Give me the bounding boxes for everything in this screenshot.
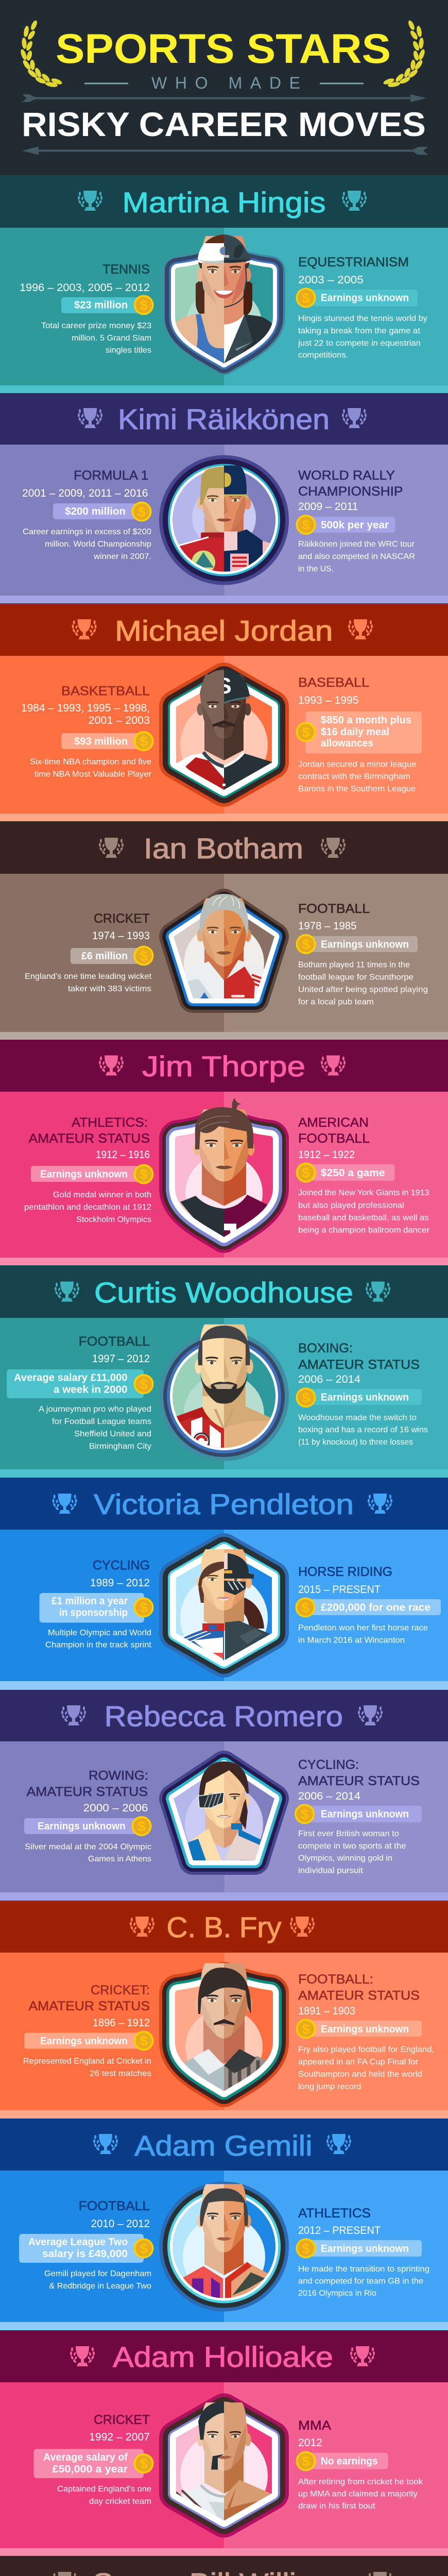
right career: baseball: BASEBALL bbox=[298, 675, 369, 690]
right career: boxing: BOXING: bbox=[298, 1341, 353, 1355]
icon: trophy right bbox=[358, 1705, 383, 1725]
cap letter: S bbox=[216, 673, 232, 699]
left career: cycling: 1989 – 2012 bbox=[90, 1577, 150, 1589]
icon: trophy right bbox=[342, 408, 367, 428]
icon: trophy left bbox=[53, 2572, 77, 2576]
icon: trophy left bbox=[99, 1055, 124, 1076]
left career: tennis: $ bbox=[140, 298, 148, 313]
right career: football: United after being spotted playing bbox=[298, 986, 428, 994]
heading: Adam Hollioake: Adam Hollioake bbox=[113, 2341, 333, 2373]
right career: boxing: Earnings unknown bbox=[321, 1392, 409, 1403]
right career: cycling: First ever British woman to bbox=[298, 1829, 399, 1838]
right career: World Rally Championship: 500k per year bbox=[321, 519, 389, 531]
panel: Jim Thorpe bbox=[0, 1040, 448, 1265]
right career: football: 1891 – 1903 bbox=[298, 2005, 355, 2017]
panel: Ian Botham bbox=[0, 821, 448, 1040]
right career: World Rally Championship: in the US. bbox=[298, 565, 334, 573]
arrow: top bbox=[22, 94, 426, 102]
left career: cricket: 1896 – 1912 bbox=[93, 2017, 150, 2029]
left career: cricket bbox=[25, 911, 153, 993]
right career: horse riding: $ bbox=[301, 1600, 309, 1616]
icon: trophy left bbox=[99, 838, 124, 858]
left career: cricket: 1992 – 2007 bbox=[89, 2431, 150, 2443]
portrait badge: Adam Hollioake bbox=[173, 2402, 275, 2528]
right career: American football: FOOTBALL bbox=[298, 1131, 370, 1146]
right career: horse riding bbox=[296, 1565, 441, 1645]
left career: tennis: million. 5 Grand Slam bbox=[72, 334, 151, 343]
left career: cycling: Champion in the track sprint bbox=[45, 1641, 152, 1650]
left career: tennis: singles titles bbox=[106, 346, 151, 354]
right career: cycling: Olympics, winning gold in bbox=[298, 1854, 392, 1863]
right career: World Rally Championship: WORLD RALLY bbox=[298, 468, 395, 483]
left career: Formula 1: $200 million bbox=[65, 506, 126, 517]
left career: football: $ bbox=[140, 1377, 148, 1392]
left career: Formula 1: Career earnings in excess of $200 bbox=[23, 528, 151, 536]
right career: American football: but also played professional bbox=[298, 1201, 404, 1210]
right career: athletics bbox=[296, 2206, 429, 2298]
left career: basketball: BASKETBALL bbox=[61, 684, 150, 699]
icon: trophy left bbox=[55, 1282, 79, 1301]
left career: cricket: day cricket team bbox=[89, 2497, 151, 2506]
right career: baseball: $ bbox=[302, 724, 310, 740]
right career: football: $ bbox=[302, 937, 310, 952]
left career: rowing: ROWING: bbox=[89, 1768, 148, 1783]
title: Sports Stars: SPORTS STARS bbox=[56, 26, 391, 72]
right career: football: $ bbox=[302, 2022, 310, 2037]
icon: trophy left bbox=[72, 619, 97, 639]
right career: horse riding: HORSE RIDING bbox=[298, 1565, 392, 1579]
left career: basketball: 2001 – 2003 bbox=[89, 715, 150, 726]
heading: Ian Botham: Ian Botham bbox=[144, 832, 303, 865]
left career: athletics: ATHLETICS: bbox=[72, 1115, 148, 1130]
right career: World Rally Championship: CHAMPIONSHIP bbox=[298, 484, 403, 499]
subtitle: who made: WHO MADE bbox=[151, 74, 300, 92]
left career: cricket: Represented England at Cricket in bbox=[23, 2057, 151, 2066]
right career: equestrianism: just 22 to compete in equestrian bbox=[298, 339, 421, 348]
left career: football: & Redbridge in League Two bbox=[49, 2282, 151, 2291]
left career: cricket: Earnings unknown bbox=[40, 2036, 128, 2047]
icon: trophy right bbox=[368, 2572, 392, 2576]
icon: trophy right bbox=[368, 1494, 392, 1514]
right career: football: football league for Scunthorpe bbox=[298, 973, 413, 981]
right career: American football: AMERICAN bbox=[298, 1115, 369, 1130]
portrait badge: Michael Jordan bbox=[173, 670, 275, 802]
left career: tennis bbox=[20, 262, 153, 354]
left career: basketball: time NBA Most Valuable Player bbox=[35, 770, 152, 779]
left career: Formula 1: million. World Championship bbox=[45, 540, 151, 549]
left career: cricket: $ bbox=[140, 948, 148, 963]
panel: Adam Hollioake bbox=[0, 2330, 448, 2556]
right career: athletics: 2016 Olympics in Rio bbox=[298, 2289, 376, 2298]
portrait badge: Adam Gemili bbox=[159, 2181, 289, 2311]
left career: football bbox=[19, 2199, 153, 2291]
right career: boxing bbox=[296, 1341, 428, 1447]
left career: athletics: Stockholm Olympics bbox=[76, 1215, 151, 1224]
right career: cycling: CYCLING: bbox=[298, 1757, 359, 1772]
left career: Formula 1 bbox=[22, 468, 151, 561]
right career: baseball: contract with the Birmingham bbox=[298, 772, 410, 781]
right career: American football: being a champion ballroom dancer bbox=[298, 1226, 430, 1234]
panel: Kimi Räikkönen bbox=[0, 393, 448, 603]
left career: cycling: CYCLING bbox=[93, 1558, 150, 1572]
right career: boxing: 2006 – 2014 bbox=[298, 1374, 360, 1385]
right career: cycling: individual pursuit bbox=[298, 1866, 364, 1875]
panel: Curtis Woodhouse bbox=[0, 1265, 448, 1478]
right career: athletics: $ bbox=[302, 2241, 310, 2257]
left career: football: FOOTBALL bbox=[79, 2199, 150, 2213]
left career: football: a week in 2000 bbox=[54, 1384, 128, 1395]
right career: football: Southampton and held the world bbox=[298, 2070, 422, 2079]
icon: trophy right bbox=[348, 619, 373, 639]
left career: rowing: 2000 – 2006 bbox=[83, 1802, 148, 1814]
right career: cycling: Earnings unknown bbox=[321, 1809, 409, 1820]
right career: football: Earnings unknown bbox=[321, 2024, 409, 2035]
left career: athletics: $ bbox=[140, 1166, 148, 1182]
icon: trophy left bbox=[130, 1917, 154, 1937]
icon: trophy left bbox=[53, 1494, 77, 1514]
left career: rowing: $ bbox=[137, 1819, 146, 1834]
left career: basketball: Six-time NBA champion and five bbox=[30, 758, 151, 767]
right career: MMA bbox=[296, 2418, 423, 2511]
icon: trophy left bbox=[93, 2134, 118, 2154]
right career: American football: $250 a game bbox=[321, 1167, 385, 1179]
heading: Victoria Pendleton: Victoria Pendleton bbox=[94, 1488, 354, 1520]
left career: tennis: Total career prize money $23 bbox=[41, 321, 151, 330]
right career: World Rally Championship: and also competed in NASCAR bbox=[298, 552, 415, 561]
right career: boxing: AMATEUR STATUS bbox=[298, 1358, 420, 1372]
right career: equestrianism bbox=[296, 255, 427, 360]
right career: baseball: Jordan secured a minor league bbox=[298, 760, 417, 769]
right career: MMA: MMA bbox=[298, 2418, 331, 2433]
right career: baseball bbox=[296, 675, 422, 793]
left career: football: Sheffield United and bbox=[74, 1430, 151, 1438]
right career: MMA: No earnings bbox=[321, 2455, 378, 2467]
right career: cycling: AMATEUR STATUS bbox=[298, 1774, 420, 1788]
left career: Formula 1: winner in 2007. bbox=[93, 552, 151, 561]
left career: Formula 1: FORMULA 1 bbox=[74, 468, 148, 483]
panel: Sonny Bill Williams bbox=[0, 2556, 448, 2576]
left career: basketball bbox=[21, 684, 153, 779]
heading: Adam Gemili: Adam Gemili bbox=[134, 2129, 313, 2162]
right career: boxing: (11 by knockout) to three losses bbox=[298, 1438, 413, 1447]
left career: cycling: $ bbox=[140, 1600, 148, 1616]
right career: equestrianism: $ bbox=[302, 291, 310, 306]
left career: cycling: in sponsorship bbox=[59, 1607, 128, 1619]
left career: rowing: Earnings unknown bbox=[38, 1821, 126, 1832]
left career: football: Birmingham City bbox=[89, 1442, 151, 1451]
right career: football: Fry also played football for England, bbox=[298, 2045, 434, 2054]
right career: American football: 1912 – 1922 bbox=[298, 1149, 355, 1161]
right career: football: Earnings unknown bbox=[321, 939, 409, 951]
right career: equestrianism: Hingis stunned the tennis world by bbox=[298, 314, 427, 323]
panel: Adam Gemili bbox=[0, 2119, 448, 2330]
icon: right laurel bbox=[383, 20, 426, 88]
right career: MMA: draw in his first bout bbox=[298, 2502, 375, 2511]
right career: MMA: After retiring from cricket he took bbox=[298, 2478, 423, 2486]
right career: baseball: $850 a month plus bbox=[321, 715, 411, 726]
left career: football: FOOTBALL bbox=[79, 1334, 150, 1349]
portrait badge: C. B. Fry bbox=[173, 1963, 275, 2096]
left career: cricket: $ bbox=[140, 2456, 148, 2471]
right career: MMA: 2012 bbox=[298, 2437, 322, 2449]
portrait badge: Ian Botham bbox=[173, 894, 275, 1004]
right career: boxing: boxing and has a record of 16 wins bbox=[298, 1426, 428, 1434]
panel: Martina Hingis bbox=[0, 175, 448, 393]
portrait badge: Curtis Woodhouse bbox=[159, 1325, 289, 1461]
right career: athletics: ATHLETICS bbox=[298, 2206, 371, 2221]
right career: football: Botham played 11 times in the bbox=[298, 960, 410, 970]
left career: athletics: 1912 – 1916 bbox=[96, 1149, 150, 1161]
left career: tennis: 1996 – 2003, 2005 – 2012 bbox=[20, 282, 150, 294]
portrait badge: Victoria Pendleton bbox=[173, 1544, 275, 1670]
icon: trophy right bbox=[342, 191, 367, 211]
left career: cricket: £6 million bbox=[81, 951, 128, 962]
left career: football: Gemili played for Dagenham bbox=[44, 2269, 151, 2278]
left career: athletics: Gold medal winner in both bbox=[53, 1191, 151, 1199]
left career: basketball: 1984 – 1993, 1995 – 1998, bbox=[21, 702, 150, 714]
left career: Formula 1: $ bbox=[137, 504, 146, 519]
right career: boxing: $ bbox=[302, 1390, 310, 1405]
right career: American football: $ bbox=[302, 1165, 310, 1181]
right career: baseball: 1993 – 1995 bbox=[298, 694, 358, 706]
portrait badge: Rebecca Romero bbox=[173, 1761, 275, 1866]
right career: baseball: Barons in the Southern League bbox=[298, 785, 416, 793]
right career: MMA: up MMA and claimed a majority bbox=[298, 2489, 418, 2498]
left career: cricket: England’s one time leading wicket bbox=[25, 972, 152, 981]
right career: horse riding: 2015 – PRESENT bbox=[298, 1584, 381, 1596]
right career: football: 1978 – 1985 bbox=[298, 920, 356, 932]
right career: World Rally Championship: Räikkönen joined the WRC tour bbox=[298, 540, 415, 549]
left career: cricket: 26 test matches bbox=[90, 2070, 151, 2078]
title: Risky Career Moves: RISKY CAREER MOVES bbox=[22, 105, 426, 143]
right career: football bbox=[296, 1972, 434, 2091]
left career: football: for Football League teams bbox=[52, 1417, 151, 1426]
heading: Curtis Woodhouse: Curtis Woodhouse bbox=[94, 1276, 353, 1309]
right career: American football bbox=[296, 1115, 430, 1234]
right career: World Rally Championship: 2009 – 2011 bbox=[298, 501, 358, 513]
right career: athletics: and competed for team GB in the bbox=[298, 2277, 423, 2286]
right career: equestrianism: competitions. bbox=[298, 351, 348, 360]
left career: basketball: $93 million bbox=[74, 736, 128, 748]
left career: tennis: TENNIS bbox=[102, 262, 150, 277]
right career: horse riding: in March 2016 at Wincanton bbox=[298, 1636, 405, 1645]
left career: rowing: Silver medal at the 2004 Olympic bbox=[25, 1842, 151, 1852]
heading: Michael Jordan: Michael Jordan bbox=[115, 614, 333, 647]
arrow: bottom bbox=[22, 146, 428, 155]
left career: cricket: $ bbox=[140, 2033, 148, 2048]
left career: cricket bbox=[23, 1983, 153, 2078]
heading: C. B. Fry: C. B. Fry bbox=[167, 1911, 281, 1943]
right career: World Rally Championship bbox=[296, 468, 415, 573]
right career: horse riding: £200,000 for one race bbox=[321, 1602, 430, 1614]
left career: cricket: AMATEUR STATUS bbox=[29, 1999, 150, 2013]
left career: Formula 1: 2001 – 2009, 2011 – 2016 bbox=[22, 487, 148, 499]
icon: trophy left bbox=[61, 1705, 86, 1725]
icon: trophy right bbox=[366, 1282, 390, 1301]
right career: cycling: $ bbox=[301, 1806, 308, 1822]
heading: Jim Thorpe: Jim Thorpe bbox=[142, 1050, 305, 1082]
icon: trophy left bbox=[70, 2346, 95, 2366]
right career: boxing: Woodhouse made the switch to bbox=[298, 1414, 417, 1422]
left career: rowing bbox=[24, 1768, 151, 1863]
panel: C. B. Fry bbox=[0, 1901, 448, 2119]
left career: football: A journeyman pro who played bbox=[39, 1405, 151, 1414]
icon: trophy left bbox=[78, 408, 102, 428]
right career: football: FOOTBALL bbox=[298, 902, 370, 916]
right career: equestrianism: taking a break from the game at bbox=[298, 327, 421, 335]
left career: cricket bbox=[34, 2413, 153, 2506]
right career: cycling bbox=[295, 1757, 422, 1875]
panel: Michael Jordan bbox=[0, 603, 448, 821]
right career: football: long jump record bbox=[298, 2082, 361, 2091]
right career: football: FOOTBALL: bbox=[298, 1972, 373, 1987]
icon: trophy right bbox=[321, 838, 346, 858]
icon: trophy right bbox=[290, 1917, 315, 1937]
right career: MMA: $ bbox=[302, 2453, 310, 2469]
left career: football: salary is £49,000 bbox=[42, 2248, 128, 2260]
left career: basketball: $ bbox=[140, 734, 148, 749]
left career: cricket: Captained England’s one bbox=[57, 2485, 151, 2494]
icon: trophy left bbox=[78, 191, 102, 211]
icon: trophy right bbox=[321, 1055, 346, 1076]
left career: cricket: 1974 – 1993 bbox=[92, 930, 150, 942]
right career: athletics: Earnings unknown bbox=[321, 2243, 409, 2255]
panel: Victoria Pendleton bbox=[0, 1478, 448, 1690]
left career: cricket: CRICKET bbox=[94, 911, 150, 926]
left career: cycling: Multiple Olympic and World bbox=[48, 1629, 151, 1637]
left career: football: 1997 – 2012 bbox=[92, 1353, 150, 1365]
right career: cycling: 2006 – 2014 bbox=[298, 1790, 360, 1802]
heading: Martina Hingis: Martina Hingis bbox=[123, 186, 325, 218]
left career: rowing: AMATEUR STATUS bbox=[27, 1785, 148, 1799]
right career: football: for a local pub team bbox=[298, 998, 374, 1007]
heading: Rebecca Romero: Rebecca Romero bbox=[105, 1700, 343, 1732]
left career: cricket: CRICKET: bbox=[91, 1983, 150, 1997]
right career: baseball: $16 daily meal bbox=[321, 726, 389, 738]
left career: football: $ bbox=[140, 2241, 148, 2257]
right career: horse riding: Pendleton won her first horse race bbox=[298, 1624, 428, 1633]
header panel bbox=[0, 0, 448, 175]
icon: trophy right bbox=[350, 2346, 375, 2366]
portrait badge: Martina Hingis bbox=[163, 234, 285, 375]
right career: athletics: He made the transition to sprinting bbox=[298, 2265, 429, 2274]
left career: football bbox=[7, 1334, 153, 1451]
right career: football: appeared in an FA Cup Final for bbox=[298, 2058, 419, 2066]
left career: cycling bbox=[40, 1558, 153, 1650]
left career: athletics bbox=[24, 1115, 153, 1224]
icon: trophy right bbox=[326, 2134, 351, 2154]
right career: cycling: compete in two sports at the bbox=[298, 1842, 406, 1851]
left career: cycling: £1 million a year bbox=[51, 1596, 128, 1607]
right career: baseball: allowances bbox=[321, 738, 373, 749]
left career: cricket: CRICKET bbox=[94, 2413, 150, 2427]
right career: equestrianism: EQUESTRIANISM bbox=[298, 255, 409, 269]
left career: athletics: Earnings unknown bbox=[40, 1169, 128, 1180]
left career: cricket: £50,000 a year bbox=[53, 2464, 128, 2475]
heading: Kimi Räikkönen: Kimi Räikkönen bbox=[118, 403, 330, 435]
left career: athletics: AMATEUR STATUS bbox=[29, 1131, 150, 1146]
portrait badge: Kimi Räikkönen bbox=[159, 455, 289, 585]
left career: football: 2010 – 2012 bbox=[91, 2218, 150, 2230]
left career: cricket: taker with 383 victims bbox=[68, 985, 151, 993]
left career: athletics: pentathlon and decathlon at 1912 bbox=[24, 1203, 151, 1212]
portrait badge: Jim Thorpe bbox=[173, 1098, 275, 1245]
left career: rowing: Games in Athens bbox=[88, 1855, 151, 1863]
left career: football: Average salary £11,000 bbox=[14, 1372, 128, 1384]
right career: athletics: 2012 – PRESENT bbox=[298, 2225, 381, 2236]
right career: American football: baseball and basketball, as well as bbox=[298, 1214, 428, 1223]
right career: equestrianism: Earnings unknown bbox=[321, 293, 409, 304]
icon: left laurel bbox=[20, 20, 63, 88]
left career: football: Average League Two bbox=[28, 2236, 128, 2248]
right career: football bbox=[296, 902, 428, 1007]
right career: World Rally Championship: $ bbox=[302, 517, 310, 533]
left career: cricket: Average salary of bbox=[43, 2452, 128, 2463]
panel: Rebecca Romero bbox=[0, 1690, 448, 1901]
right career: American football: Joined the New York Giants in 1913 bbox=[298, 1189, 429, 1197]
left career: tennis: $23 million bbox=[74, 300, 128, 311]
right career: football: AMATEUR STATUS bbox=[298, 1989, 420, 2003]
right career: equestrianism: 2003 – 2005 bbox=[298, 274, 364, 286]
